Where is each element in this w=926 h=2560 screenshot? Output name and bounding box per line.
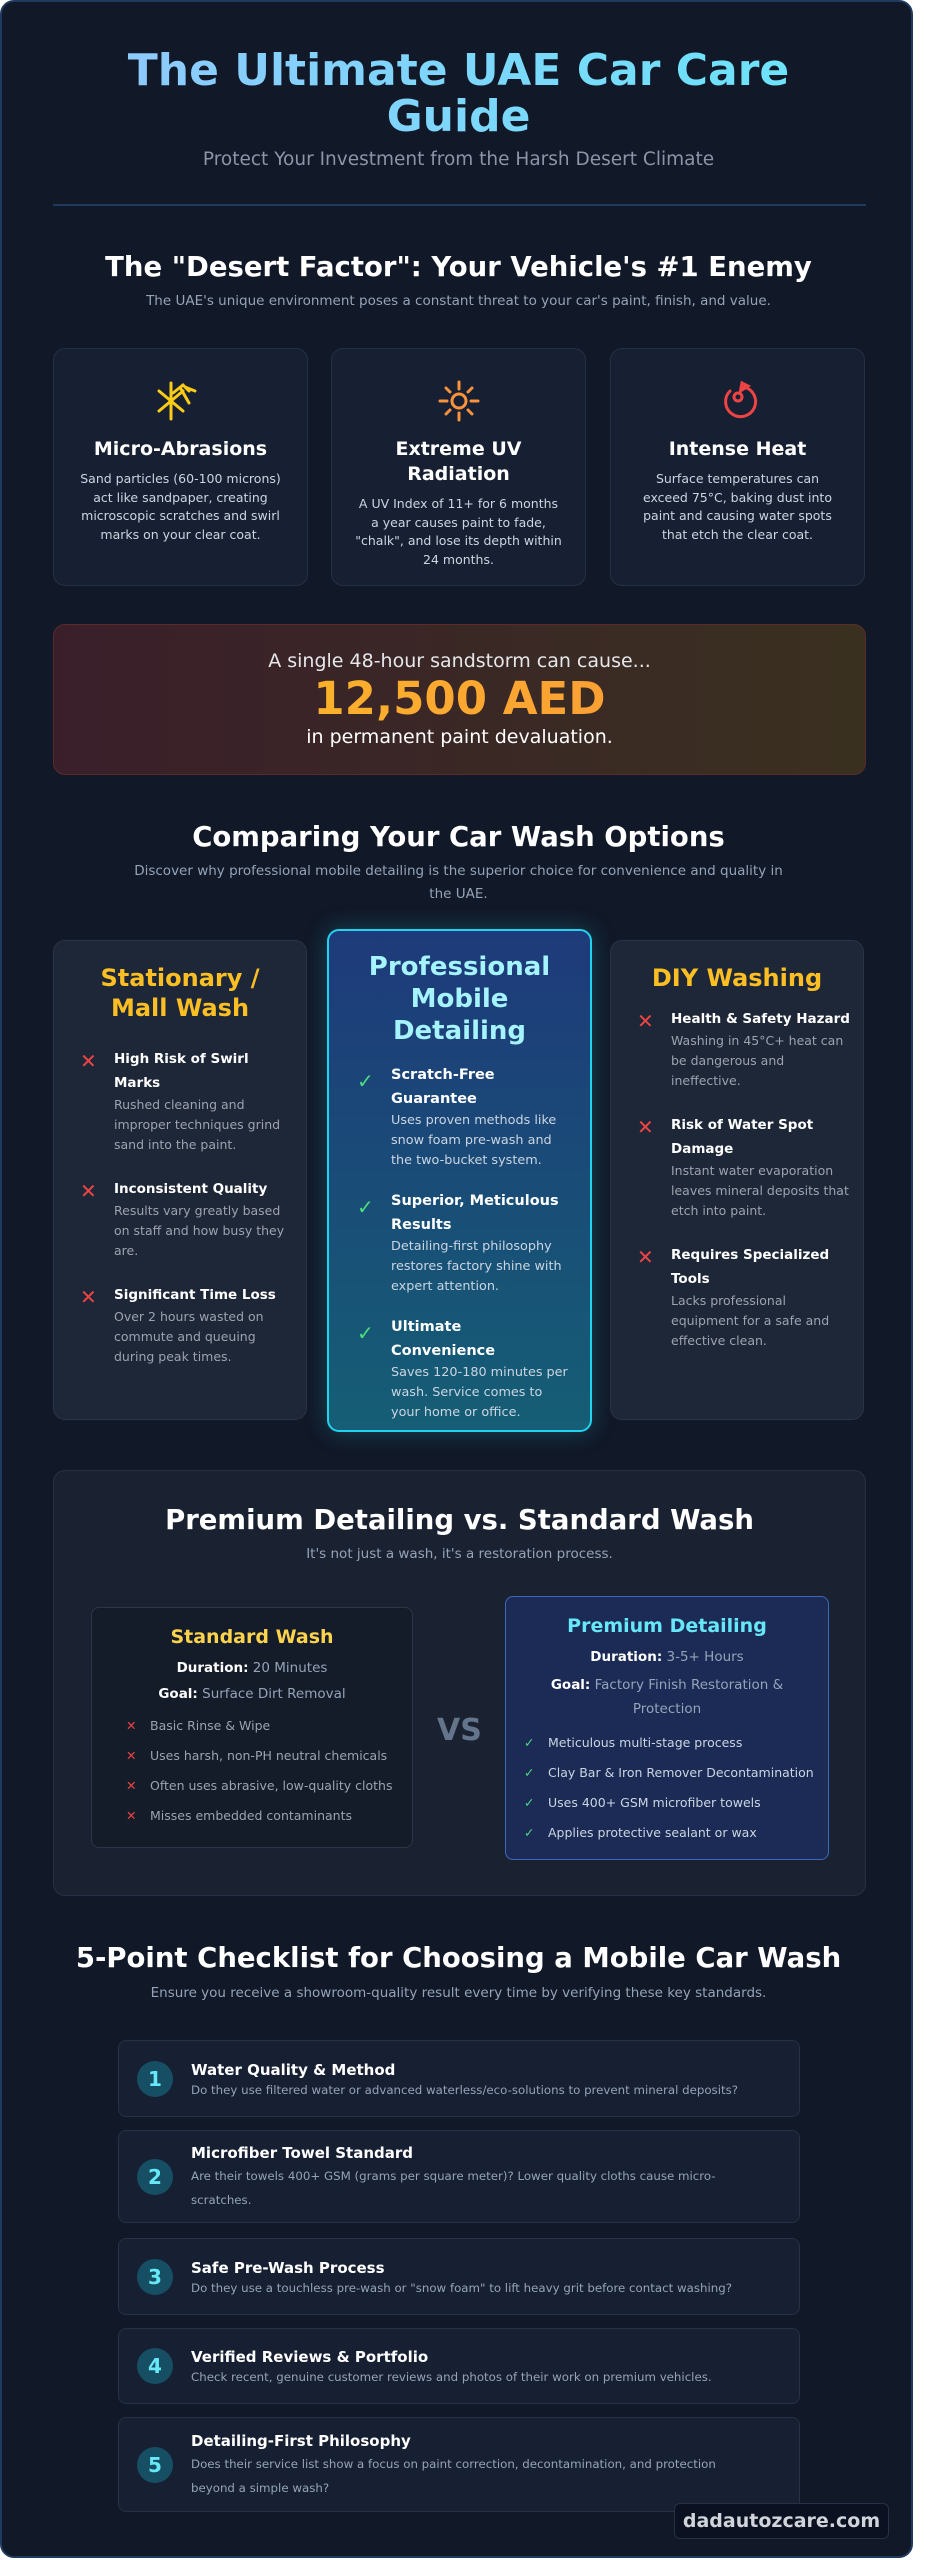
panel: professional mobile: Ultimate Convenience	[391, 1319, 495, 1359]
panel: professional mobile: ✓	[357, 1069, 374, 1093]
box: standard wash: Goal: Surface Dirt Removal	[158, 1686, 346, 1702]
checklist item 1: Water Quality & Method	[191, 2060, 395, 2078]
subheading: It's not just a wash, it's a restoration process.	[306, 1546, 613, 1562]
box: standard wash: Misses embedded contaminants	[150, 1808, 352, 1823]
panel: UV: A UV Index of 11+ for 6 months a year causes paint to fade, "chalk", and lose its depth within 24 months.	[355, 496, 562, 566]
callout: sandstorm	[53, 624, 866, 775]
panel: professional mobile: ✓	[357, 1195, 374, 1219]
panel: DIY: Lacks professional equipment for a safe and effective clean.	[671, 1293, 829, 1348]
panel: stationary: Mall Wash	[111, 994, 249, 1022]
panel: professional mobile: Uses proven methods like snow foam pre-wash and the two-bucket system.	[391, 1113, 556, 1168]
icon: heat	[724, 380, 758, 418]
panel: DIY: Requires Specialized Tools	[671, 1247, 829, 1287]
box: premium detailing: Premium Detailing	[567, 1615, 767, 1637]
panel: micro-abrasions	[53, 348, 308, 586]
checklist item 5	[118, 2417, 800, 2512]
box: standard wash: ✕	[126, 1718, 136, 1733]
box: standard wash: Basic Rinse & Wipe	[150, 1718, 270, 1733]
panel: UV	[331, 348, 586, 586]
panel: DIY: DIY Washing	[652, 964, 822, 992]
subheading: desert factor: The UAE's unique environment poses a constant threat to your car's paint, finish, and value.	[146, 293, 771, 309]
checklist item 5: 5	[148, 2452, 162, 2476]
box: premium detailing: Applies protective sealant or wax	[548, 1825, 757, 1840]
box: premium detailing: Uses 400+ GSM microfiber towels	[548, 1795, 761, 1810]
title	[2, 48, 915, 140]
icon: sand	[157, 382, 196, 420]
panel: professional mobile: Scratch-Free Guarantee	[391, 1067, 495, 1107]
panel: DIY: ✕	[637, 1115, 654, 1139]
box: standard wash: Uses harsh, non-PH neutral chemicals	[150, 1748, 387, 1763]
checklist item 4: Check recent, genuine customer reviews and photos of their work on premium vehicles.	[191, 2370, 712, 2384]
panel: professional mobile: Saves 120-180 minutes per wash. Service comes to your home or office.	[391, 1365, 568, 1420]
subheading: checklist: Ensure you receive a showroom-quality result every time by verifying these key standards.	[151, 1985, 766, 2001]
checklist item 2: 2	[148, 2164, 162, 2188]
panel: stationary: Over 2 hours wasted on commute and queuing during peak times.	[114, 1309, 264, 1364]
box: premium detailing: ✓	[524, 1795, 534, 1810]
icon: sun	[438, 380, 480, 422]
checklist item 1	[118, 2040, 800, 2117]
checklist item 2: Microfiber Towel Standard	[191, 2144, 413, 2162]
panel: stationary: High Risk of Swirl Marks	[114, 1051, 249, 1091]
checklist item 4: 4	[148, 2354, 162, 2378]
box: premium detailing	[505, 1596, 829, 1860]
panel: stationary: ✕	[80, 1179, 97, 1203]
checklist item 2: Are their towels 400+ GSM (grams per square meter)? Lower quality cloths cause micro-scratches.	[191, 2168, 716, 2206]
box: premium detailing: Clay Bar & Iron Remover Decontamination	[548, 1765, 814, 1780]
watermark	[674, 2503, 889, 2539]
panel: stationary: Significant Time Loss	[114, 1287, 276, 1303]
checklist item 3: Safe Pre-Wash Process	[191, 2258, 385, 2276]
panel: heat	[610, 348, 865, 586]
panel: heat: Surface temperatures can exceed 75°C, baking dust into paint and causing water spots that etch the clear coat.	[643, 471, 832, 542]
title: The Ultimate UAE Car Care	[128, 45, 789, 96]
heading: desert factor: The "Desert Factor": Your Vehicle's #1 Enemy	[105, 251, 812, 283]
box: premium detailing: ✓	[524, 1825, 534, 1840]
checklist item 4: Verified Reviews & Portfolio	[191, 2348, 428, 2366]
heading: comparing: Comparing Your Car Wash Options	[192, 821, 725, 853]
panel: DIY: Instant water evaporation leaves mineral deposits that etch into paint.	[671, 1163, 849, 1218]
checklist item 3	[118, 2238, 800, 2315]
panel: DIY: ✕	[637, 1009, 654, 1033]
checklist item 3: 3	[148, 2264, 162, 2288]
heading: Premium Detailing vs. Standard Wash	[165, 1504, 754, 1536]
panel: stationary: Inconsistent Quality	[114, 1181, 267, 1197]
panel: stationary: Results vary greatly based on staff and how busy they are.	[114, 1203, 284, 1258]
box: premium detailing: Duration: 3-5+ Hours	[590, 1649, 744, 1665]
panel: micro-abrasions: Micro-Abrasions	[94, 438, 267, 460]
box: premium detailing: Meticulous multi-stage process	[548, 1735, 742, 1750]
panel: DIY: Risk of Water Spot Damage	[671, 1117, 813, 1157]
checklist item 1: 1	[148, 2066, 162, 2090]
panel: professional mobile: Mobile	[411, 984, 508, 1014]
checklist item 3: Do they use a touchless pre-wash or "snow foam" to lift heavy grit before contact washing?	[191, 2280, 732, 2294]
panel: stationary	[53, 940, 307, 1420]
box: premium detailing: ✓	[524, 1735, 534, 1750]
panel: stationary: ✕	[80, 1285, 97, 1309]
panel: professional mobile: ✓	[357, 1321, 374, 1345]
box: standard wash: Often uses abrasive, low-quality cloths	[150, 1778, 392, 1793]
panel: DIY: Washing in 45°C+ heat can be dangerous and ineffective.	[671, 1033, 843, 1088]
panel: UV: Radiation	[407, 463, 510, 485]
watermark: dadautozcare.com	[683, 2510, 880, 2532]
panel: professional mobile: Superior, Meticulous Results	[391, 1193, 559, 1233]
callout: sandstorm: in permanent paint devaluation.	[306, 726, 613, 748]
panel: professional mobile: Professional	[369, 952, 550, 982]
vs label: VS	[437, 1713, 482, 1748]
box: standard wash: ✕	[126, 1748, 136, 1763]
callout: sandstorm: A single 48-hour sandstorm can cause...	[268, 650, 651, 672]
panel: professional mobile	[327, 929, 592, 1432]
panel: DIY: ✕	[637, 1245, 654, 1269]
panel: professional mobile: Detailing	[393, 1016, 526, 1046]
stat	[54, 672, 865, 726]
box: standard wash: Standard Wash	[170, 1626, 334, 1648]
checklist item 5: Detailing-First Philosophy	[191, 2432, 411, 2450]
checklist item 5: Does their service list show a focus on paint correction, decontamination, and protection beyond a simple wash?	[191, 2456, 716, 2494]
box: premium detailing: Goal: Factory Finish Restoration & Protection	[551, 1677, 783, 1717]
subtitle: Protect Your Investment from the Harsh Desert Climate	[203, 149, 714, 170]
box: standard wash	[91, 1607, 413, 1848]
panel: stationary: Stationary /	[100, 964, 260, 992]
panel: stationary: Rushed cleaning and improper techniques grind sand into the paint.	[114, 1097, 280, 1152]
panel: professional mobile: Detailing-first philosophy restores factory shine with expert attention.	[391, 1239, 562, 1294]
stat: 12,500 AED	[313, 672, 606, 725]
title: Guide	[387, 91, 530, 142]
panel: DIY	[610, 940, 864, 1420]
checklist item 1: Do they use filtered water or advanced waterless/eco-solutions to prevent mineral deposits?	[191, 2082, 738, 2096]
box: standard wash: ✕	[126, 1778, 136, 1793]
panel: micro-abrasions: Sand particles (60-100 microns) act like sandpaper, creating microscopic scratches and swirl marks on your clear coat.	[80, 471, 281, 542]
checklist item 2	[118, 2130, 800, 2223]
box: standard wash: ✕	[126, 1808, 136, 1823]
panel: UV: Extreme UV	[395, 438, 522, 460]
subheading: comparing: Discover why professional mobile detailing is the superior choice for convenience and quality in the UAE.	[134, 863, 783, 902]
box: premium detailing: ✓	[524, 1765, 534, 1780]
box: standard wash: Duration: 20 Minutes	[177, 1660, 327, 1676]
panel: DIY: Health & Safety Hazard	[671, 1011, 850, 1027]
heading: checklist: 5-Point Checklist for Choosing a Mobile Car Wash	[76, 1942, 841, 1974]
panel: premium vs standard	[53, 1470, 866, 1896]
checklist item 4	[118, 2328, 800, 2404]
panel: heat: Intense Heat	[669, 438, 806, 460]
panel: stationary: ✕	[80, 1049, 97, 1073]
